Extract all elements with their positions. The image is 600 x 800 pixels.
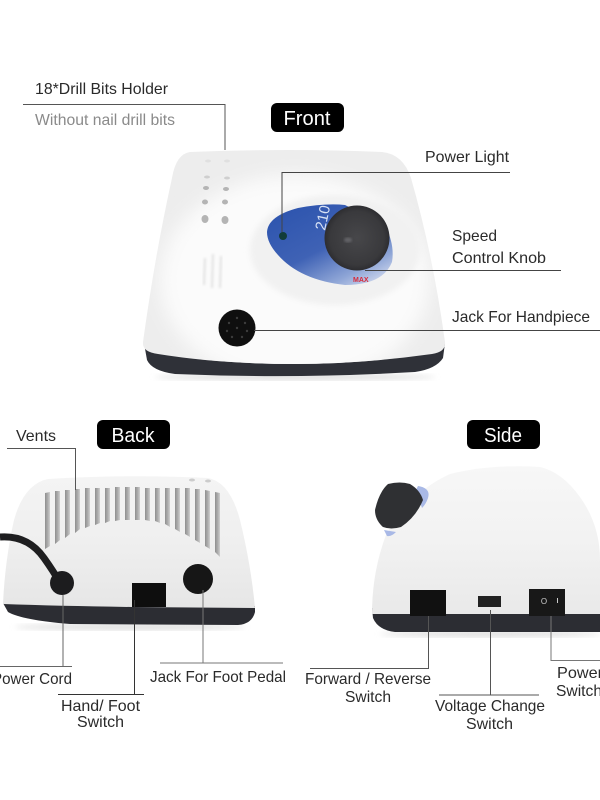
dark base (144, 343, 445, 376)
jack pins (226, 317, 248, 338)
tag: side: Side (484, 425, 522, 447)
side knob (375, 482, 423, 528)
vent slats (45, 487, 220, 557)
embossed grooves (204, 254, 221, 288)
knob highlight (344, 238, 352, 242)
callout: speed control knob: Control Knob (452, 250, 546, 267)
power switch (529, 589, 565, 616)
cord grommet (50, 571, 74, 595)
handpiece jack (218, 310, 256, 346)
callout: speed control knob: Speed (452, 228, 497, 245)
callout: drill bits holder: 18*Drill Bits Holder (35, 81, 169, 98)
max label: MAX (353, 277, 369, 284)
callout: hand foot switch: Switch (77, 714, 124, 731)
callout: voltage change switch: Voltage Change (435, 698, 545, 715)
device shadow (155, 374, 435, 380)
top holes (189, 478, 195, 482)
callout: power switch (551, 616, 600, 700)
white body (3, 476, 255, 608)
callout: drill bits holder: Without nail drill bits (35, 112, 175, 129)
callout: voltage change switch: Switch (466, 716, 513, 733)
tag: side (467, 420, 540, 449)
blue dial edge (384, 486, 429, 536)
power light LED (279, 232, 287, 240)
callout: voltage change switch (435, 610, 545, 733)
callout: power light: Power Light (425, 149, 510, 166)
callout: hand foot switch (58, 600, 144, 731)
speed knob (324, 206, 390, 270)
tag: front: Front (284, 108, 331, 130)
dark base (3, 603, 255, 625)
back device (0, 476, 255, 630)
vent holes (202, 160, 230, 224)
callout: jack for foot pedal (150, 590, 286, 686)
dial recess (250, 195, 420, 305)
callout: power light (282, 149, 510, 232)
callout: vents (7, 428, 76, 490)
callout: jack for foot pedal: Jack For Foot Pedal (150, 669, 286, 686)
tag: back (97, 420, 170, 449)
device shadow (380, 631, 600, 637)
hand foot switch (132, 583, 166, 607)
blue dial plate (267, 204, 393, 285)
front device (140, 148, 450, 385)
forward reverse switch (410, 590, 446, 616)
power cord (0, 537, 60, 583)
callout: speed control knob (365, 228, 561, 270)
device shadow (15, 624, 245, 630)
callout: drill bits holder (23, 81, 225, 150)
voltage switch (478, 596, 501, 607)
power switch on mark (557, 598, 558, 603)
callout: jack for handpiece: Jack For Handpiece (452, 309, 590, 326)
side device (372, 466, 600, 637)
callout: forward reverse switch: Switch (345, 689, 391, 706)
dark base (372, 608, 600, 632)
foot pedal jack (183, 564, 213, 594)
white body (372, 466, 600, 614)
white body (143, 150, 445, 364)
callout: vents: Vents (16, 428, 56, 445)
callout: forward reverse switch: Forward / Reverse (305, 671, 431, 688)
power switch marks: O (541, 597, 547, 606)
tag: front (271, 103, 344, 132)
tag: back: Back (112, 425, 155, 447)
model label: 210 (312, 204, 334, 232)
callout: hand foot switch: Hand/ Foot (61, 698, 141, 715)
callout: power cord (0, 595, 72, 688)
callout: forward reverse switch (305, 616, 431, 706)
